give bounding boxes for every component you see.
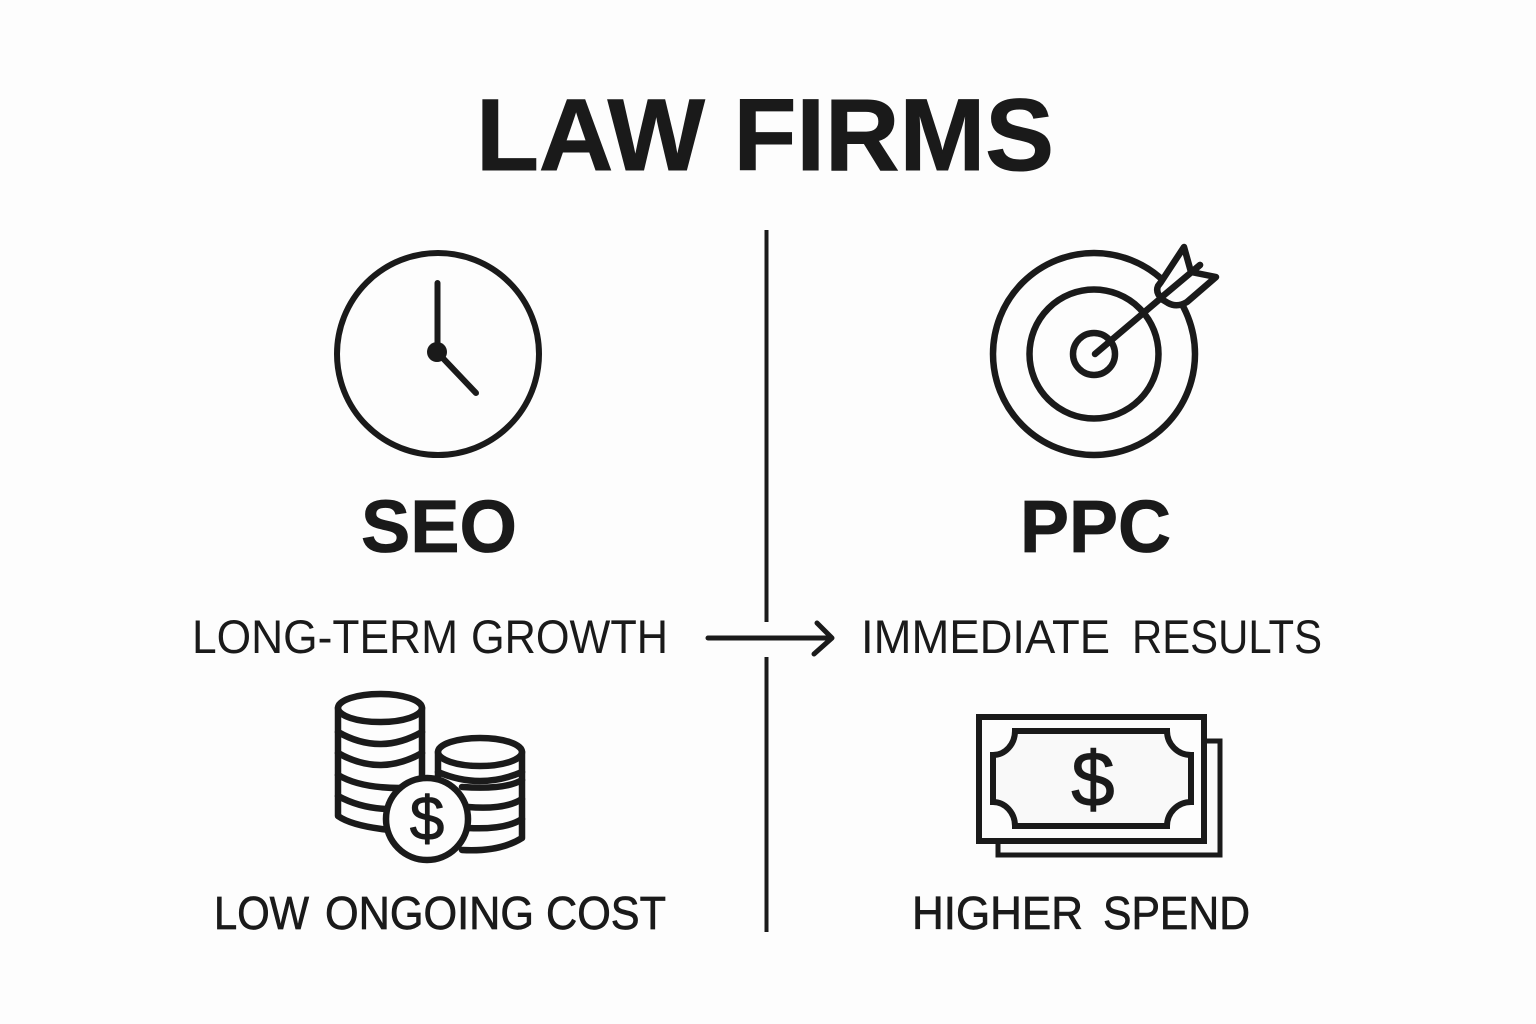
icon: clock <box>337 253 539 455</box>
label: immediate results: RESULTS <box>1132 610 1322 663</box>
label: low ongoing cost: ONGOING <box>325 887 534 939</box>
arrow <box>708 623 832 654</box>
icon: coin stacks <box>338 694 522 860</box>
icon: target with arrow <box>993 247 1216 455</box>
label: higher spend <box>912 887 1250 939</box>
dollar sign on coin: $ <box>410 785 444 854</box>
label: immediate results <box>861 610 1322 663</box>
label: immediate results: IMMEDIATE <box>861 610 1110 663</box>
label: low ongoing cost: COST <box>546 887 666 939</box>
label: higher spend: SPEND <box>1103 887 1250 939</box>
label: long-term growth: GROWTH <box>471 610 668 663</box>
label: low ongoing cost: LOW <box>214 887 310 939</box>
panel: PPC <box>861 247 1322 939</box>
center divider <box>764 230 768 932</box>
title: LAW FIRMS <box>476 78 1054 192</box>
dollar sign on banknote: $ <box>1071 735 1115 823</box>
label: low ongoing cost <box>214 887 666 939</box>
label: long-term growth: LONG-TERM <box>192 610 458 663</box>
heading: SEO: SEO <box>361 485 517 568</box>
panel: SEO <box>192 253 668 939</box>
heading: PPC: PPC <box>1020 485 1171 568</box>
icon: banknotes <box>979 717 1220 855</box>
label: higher spend: HIGHER <box>912 887 1083 939</box>
label: long-term growth <box>192 610 668 663</box>
